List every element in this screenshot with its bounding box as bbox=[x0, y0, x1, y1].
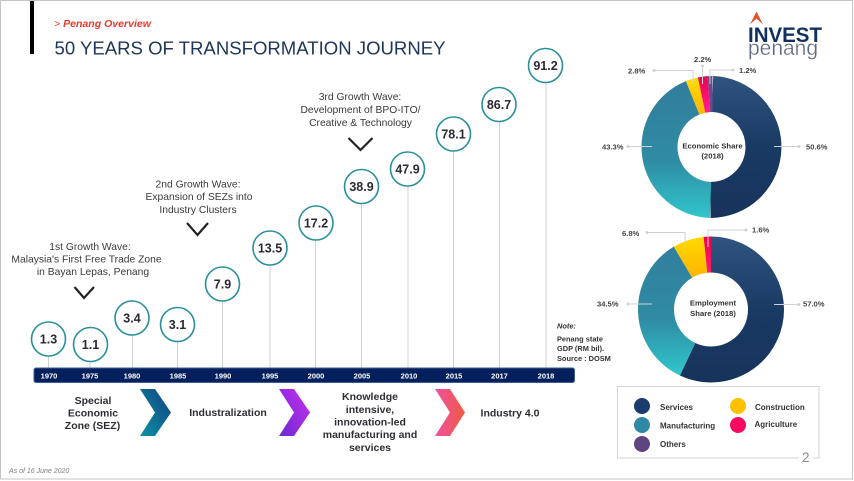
legend: Agriculture bbox=[754, 420, 798, 429]
growth wave 2 annotation: Industry Clusters bbox=[159, 205, 237, 216]
GDP lollipop chart: 1.3 bbox=[40, 332, 57, 346]
donut chart: employment share: 34.5% bbox=[597, 300, 619, 308]
legend bbox=[618, 386, 819, 458]
timeline bar with years: 1985 bbox=[170, 372, 186, 380]
legend: Manufacturing bbox=[660, 422, 715, 430]
phase: Knowledge intensive manufacturing: innovation-led bbox=[334, 416, 406, 428]
growth wave 2 annotation bbox=[145, 180, 253, 235]
arrow: phase chevron 3 bbox=[435, 389, 465, 436]
timeline bar with years: 2005 bbox=[354, 372, 370, 380]
phase: Industry 4.0: Industry 4.0 bbox=[481, 408, 540, 420]
donut chart: economic share: 43.3% bbox=[602, 142, 624, 152]
source note: Source : DOSM bbox=[557, 354, 611, 363]
phase: Knowledge intensive manufacturing: Knowledge bbox=[342, 391, 398, 403]
GDP lollipop chart: 78.1 bbox=[441, 128, 466, 142]
GDP lollipop chart: 13.5 bbox=[258, 242, 282, 256]
donut chart: economic share: Economic Share bbox=[682, 142, 743, 150]
legend: Construction bbox=[755, 403, 805, 412]
header accent bar bbox=[30, 1, 34, 54]
growth wave 1 annotation: 1st Growth Wave: bbox=[49, 242, 131, 253]
timeline bar with years: 2000 bbox=[308, 372, 324, 380]
timeline bar with years bbox=[34, 368, 574, 382]
phase: Special Economic Zone: Special bbox=[75, 395, 111, 407]
GDP lollipop chart: 3.1 bbox=[169, 318, 186, 332]
source note: GDP (RM bil). bbox=[557, 344, 604, 353]
donut chart: employment share bbox=[597, 226, 825, 364]
GDP lollipop chart: 17.2 bbox=[304, 216, 328, 230]
growth wave 2 annotation: 2nd Growth Wave: bbox=[156, 180, 240, 190]
phase: Knowledge intensive manufacturing bbox=[323, 391, 417, 454]
donut chart: economic share: (2018) bbox=[701, 152, 724, 160]
donut chart: economic share: 2.2% bbox=[694, 55, 712, 64]
phase: Knowledge intensive manufacturing: services bbox=[349, 442, 391, 454]
arrow: phase chevron 2 bbox=[279, 389, 310, 436]
GDP lollipop chart bbox=[32, 48, 562, 368]
legend: Services bbox=[660, 403, 693, 412]
donut chart: employment share: Share (2018) bbox=[690, 309, 736, 318]
growth wave 2 annotation: Expansion of SEZs into bbox=[145, 192, 253, 203]
date footnote: As of 16 June 2020 bbox=[8, 468, 69, 475]
growth wave 1 annotation: Malaysia's First Free Trade Zone bbox=[11, 254, 162, 266]
growth wave 3 annotation bbox=[300, 92, 421, 150]
donut chart: economic share: 2.8% bbox=[628, 66, 646, 76]
arrow: phase chevron 1 bbox=[140, 389, 171, 436]
GDP lollipop chart: 1.1 bbox=[82, 338, 99, 352]
GDP lollipop chart: 47.9 bbox=[395, 162, 420, 176]
GDP lollipop chart: 7.9 bbox=[214, 278, 231, 292]
phase: Knowledge intensive manufacturing: manufacturing and bbox=[323, 429, 417, 441]
timeline bar with years: 1980 bbox=[124, 372, 140, 380]
timeline bar with years: 2015 bbox=[446, 372, 462, 380]
phase: Knowledge intensive manufacturing: intensive, bbox=[346, 404, 394, 416]
growth wave 3 annotation: Creative & Technology bbox=[309, 118, 413, 129]
growth wave 3 annotation: 3rd Growth Wave: bbox=[319, 92, 401, 103]
phase: Special Economic Zone bbox=[65, 395, 120, 432]
timeline bar with years: 1975 bbox=[82, 372, 98, 380]
page number text: 2 bbox=[802, 450, 810, 465]
source note: Note: bbox=[557, 322, 576, 330]
growth wave 3 annotation: Development of BPO-ITO/ bbox=[300, 105, 421, 116]
title: 50 YEARS OF TRANSFORMATION JOURNEY bbox=[54, 38, 446, 58]
growth wave 1 annotation: in Bayan Lepas, Penang bbox=[37, 267, 149, 278]
timeline bar with years: 1990 bbox=[215, 372, 231, 380]
source note: Penang state bbox=[557, 334, 603, 344]
donut chart: employment share: 57.0% bbox=[803, 300, 825, 308]
phase: Special Economic Zone: Zone (SEZ) bbox=[65, 420, 120, 432]
donut chart: employment share: 6.8% bbox=[622, 229, 640, 238]
logo: Invest Penang bbox=[748, 12, 823, 60]
growth wave 1 annotation bbox=[11, 242, 162, 298]
timeline bar with years: 2018 bbox=[538, 372, 554, 380]
donut chart: employment share: Employment bbox=[690, 298, 737, 308]
timeline bar with years: 1970 bbox=[41, 372, 57, 380]
donut chart: economic share: 1.2% bbox=[739, 66, 757, 75]
logo: Invest Penang: penang bbox=[748, 37, 818, 60]
section label: > Penang Overview bbox=[54, 18, 152, 30]
page number background bbox=[799, 450, 813, 464]
GDP lollipop chart: 3.4 bbox=[123, 312, 141, 326]
timeline bar with years: 2017 bbox=[491, 372, 508, 380]
GDP lollipop chart: 86.7 bbox=[487, 98, 511, 112]
logo: Invest Penang: INVEST bbox=[748, 22, 823, 47]
timeline bar with years: 2010 bbox=[401, 372, 417, 380]
donut chart: economic share: 50.6% bbox=[806, 142, 828, 152]
legend: Others bbox=[660, 440, 686, 449]
phase: Industralization: Industralization bbox=[189, 407, 267, 419]
donut chart: economic share bbox=[602, 55, 828, 200]
source note bbox=[557, 322, 611, 363]
GDP lollipop chart: 91.2 bbox=[533, 59, 558, 73]
donut chart: employment share: 1.6% bbox=[752, 226, 770, 234]
timeline bar with years: 1995 bbox=[262, 372, 278, 380]
phase: Special Economic Zone: Economic bbox=[68, 408, 118, 420]
GDP lollipop chart: 38.9 bbox=[349, 180, 374, 194]
